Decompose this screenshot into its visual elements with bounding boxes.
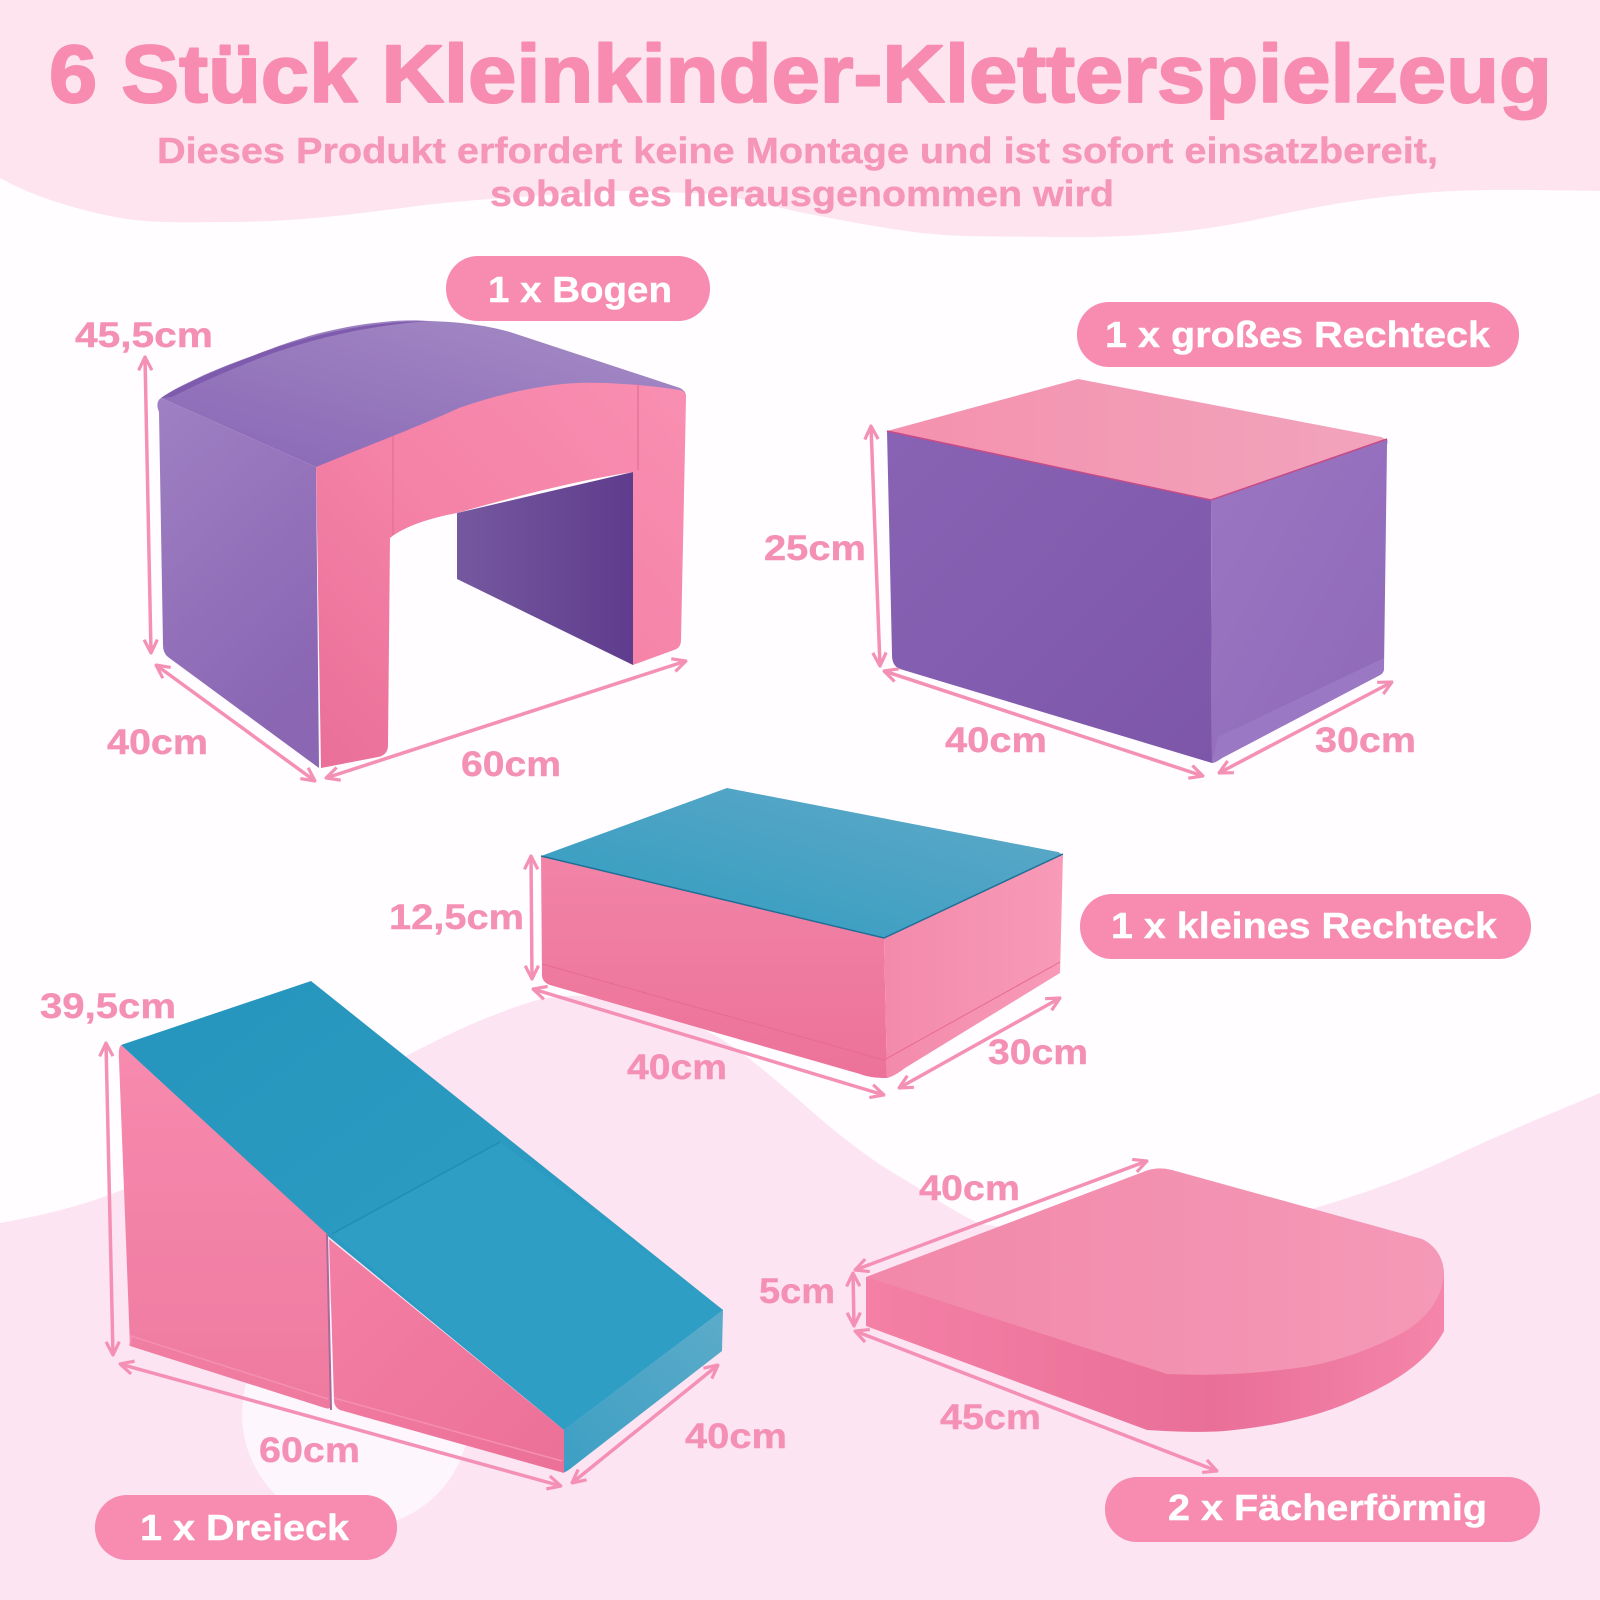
subtitle: sobald es herausgenommen wird xyxy=(490,173,1114,214)
product: arch piece xyxy=(157,320,686,768)
background: bottom pink wave xyxy=(0,996,1600,1600)
dimensions: fan shape: 5cm xyxy=(759,1272,835,1311)
dimensions: triangle ramp: 40cm xyxy=(685,1417,787,1456)
dimensions: small rectangle: 40cm xyxy=(627,1048,727,1087)
dimensions: triangle ramp: 39,5cm xyxy=(40,987,176,1026)
product: fan shape xyxy=(866,1168,1444,1432)
subtitle: Dieses Produkt erfordert keine Montage und ist sofort einsatzbereit, xyxy=(157,130,1438,171)
label: 1 x Bogen: 1 x Bogen xyxy=(488,269,672,310)
label: 1 x kleines Rechteck xyxy=(1080,894,1531,959)
dimensions: arch: 60cm xyxy=(461,745,561,784)
dimensions: triangle ramp xyxy=(40,987,787,1486)
dimensions: fan shape: 45cm xyxy=(940,1398,1041,1437)
product: large rectangle xyxy=(887,379,1388,763)
product: small rectangle xyxy=(541,788,1063,1078)
title: 6 Stück Kleinkinder-Kletterspielzeug xyxy=(49,29,1552,120)
label: 1 x großes Rechteck: 1 x großes Rechteck xyxy=(1105,314,1491,355)
dimensions: small rectangle: 12,5cm xyxy=(389,898,524,937)
dimensions: large rectangle: 40cm xyxy=(945,721,1047,760)
dimensions: triangle ramp: 60cm xyxy=(259,1431,360,1470)
dimensions: small rectangle xyxy=(389,856,1088,1095)
dimensions: arch: 45,5cm xyxy=(75,316,213,355)
dimensions: fan shape: 40cm xyxy=(919,1169,1020,1208)
dimensions: large rectangle: 25cm xyxy=(764,529,866,568)
label: 2 x Fächerförmig: 2 x Fächerförmig xyxy=(1168,1487,1487,1528)
dimensions: arch xyxy=(75,316,686,784)
label: 1 x großes Rechteck xyxy=(1077,302,1519,367)
dimensions: large rectangle xyxy=(764,426,1416,776)
label: 1 x Bogen xyxy=(446,256,710,321)
product: triangle ramp xyxy=(119,981,723,1473)
label: 1 x kleines Rechteck: 1 x kleines Rechteck xyxy=(1111,905,1498,946)
dimensions: fan shape xyxy=(759,1161,1217,1471)
label: 1 x Dreieck: 1 x Dreieck xyxy=(140,1507,350,1548)
dimensions: small rectangle: 30cm xyxy=(988,1033,1088,1072)
subtitle xyxy=(157,130,1438,214)
label: 1 x Dreieck xyxy=(95,1495,397,1560)
label: 2 x Fächerförmig xyxy=(1105,1477,1540,1542)
dimensions: large rectangle: 30cm xyxy=(1315,721,1416,760)
background: pale circle behind ramp xyxy=(242,1300,470,1528)
background: top pink wave xyxy=(0,0,1600,237)
dimensions: arch: 40cm xyxy=(107,723,208,762)
